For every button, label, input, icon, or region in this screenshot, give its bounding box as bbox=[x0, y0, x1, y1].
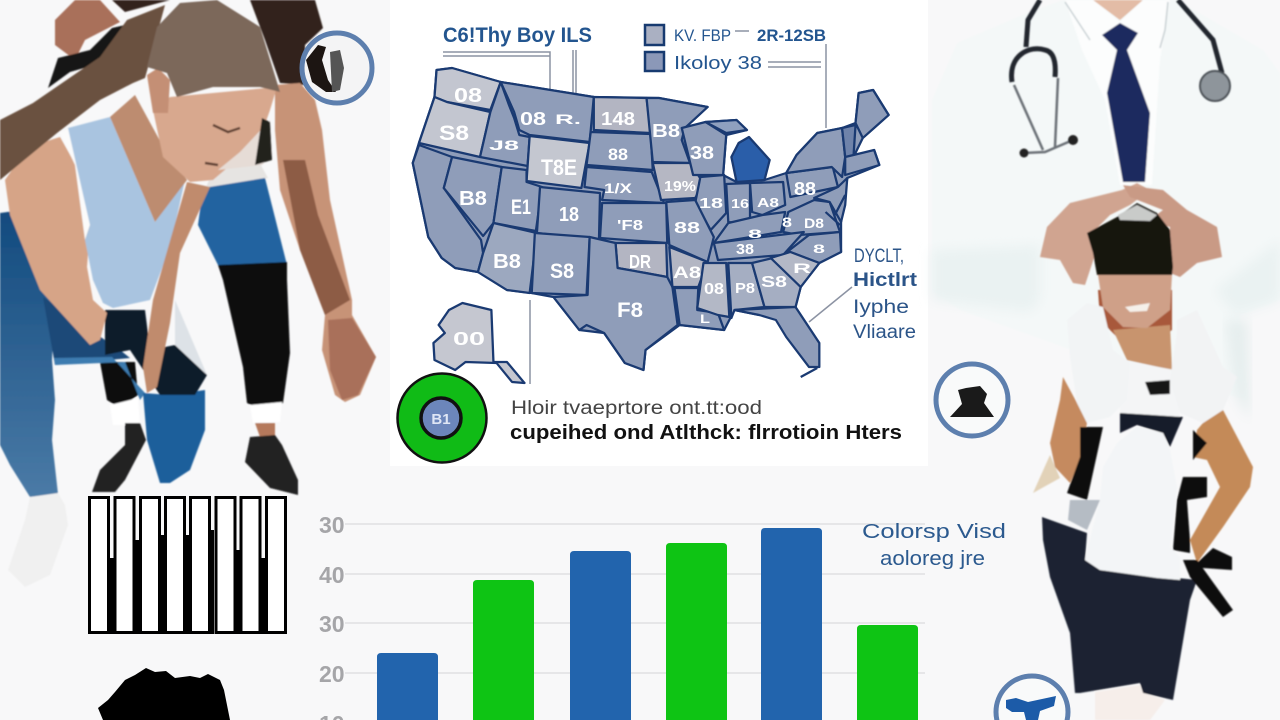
woman cap bbox=[1087, 203, 1173, 275]
arm near bbox=[5, 137, 107, 345]
state value labels: 1/X bbox=[604, 180, 633, 196]
caption text bbox=[510, 398, 902, 444]
state value labels: T8E bbox=[541, 155, 577, 180]
bar chart bbox=[319, 512, 925, 720]
state value labels: 38 bbox=[690, 143, 714, 163]
state value labels: S8 bbox=[439, 122, 469, 145]
ponytail bbox=[0, 5, 165, 180]
woman arms bbox=[1050, 377, 1087, 483]
panel: map bbox=[390, 0, 928, 466]
near leg bbox=[0, 210, 58, 497]
barcode bars bbox=[90, 498, 286, 634]
arm far bbox=[143, 182, 210, 393]
stethoscope bbox=[1012, 0, 1222, 153]
state value labels: 148 bbox=[601, 109, 635, 129]
front shin bbox=[143, 390, 205, 483]
state value labels: 38 bbox=[736, 241, 754, 258]
photo: athlete woman and trainer bbox=[0, 0, 376, 587]
icon: green ring badge bbox=[398, 374, 486, 462]
chart legend text: aoloreg jre bbox=[880, 548, 985, 570]
state value labels: 08 bbox=[454, 85, 482, 107]
map legend: Ikoloy 38 bbox=[674, 53, 762, 73]
state value labels: 08 bbox=[520, 109, 546, 129]
caption text: cupeihed ond Atlthck: flrrotioin Hters bbox=[510, 422, 902, 444]
state value labels: P8 bbox=[735, 280, 755, 297]
state value labels: DR bbox=[629, 252, 651, 272]
state value labels: 18 bbox=[559, 204, 579, 226]
state value labels: L bbox=[700, 312, 710, 326]
doctor neck and shirt bbox=[1093, 0, 1143, 20]
callout text: right side: Vliaare bbox=[853, 322, 916, 343]
woman face, hair and neck bbox=[1098, 290, 1172, 345]
chart legend text: Colorsp Visd bbox=[862, 521, 1006, 543]
axis labels: 40 bbox=[319, 562, 345, 588]
woman shorts bbox=[1042, 517, 1197, 700]
thigh bbox=[43, 297, 130, 365]
state value labels bbox=[439, 85, 826, 349]
state value labels: E1 bbox=[511, 196, 531, 219]
woman top bbox=[1120, 360, 1180, 420]
map legend: 2R-12SB bbox=[757, 26, 826, 45]
state value labels: D8 bbox=[804, 215, 824, 231]
axis labels: 30 bbox=[319, 611, 345, 637]
state value labels: J8 bbox=[489, 137, 519, 153]
map legend bbox=[645, 25, 826, 73]
bars bbox=[377, 528, 918, 720]
state value labels: A8 bbox=[757, 195, 779, 210]
heading: map title: C6!Thy Boy ILS bbox=[443, 24, 592, 47]
state shapes bbox=[413, 68, 889, 383]
callout text: right side: DYCLT, bbox=[854, 246, 904, 267]
trainer behind bbox=[112, 0, 170, 12]
axis labels: 30 bbox=[319, 512, 345, 538]
hands bbox=[1040, 183, 1150, 285]
axis labels: 20 bbox=[319, 661, 345, 687]
icon: badge top left bbox=[302, 33, 372, 103]
caption text: Hloir tvaeprtore ont.tt:ood bbox=[511, 398, 762, 419]
state value labels: 8 bbox=[782, 214, 792, 230]
belt strap bbox=[1183, 548, 1233, 617]
tie bbox=[1102, 23, 1150, 182]
callout text: right side: Iyphe bbox=[853, 297, 909, 318]
state value labels: 19% bbox=[664, 178, 696, 195]
state value labels: 8 bbox=[748, 227, 763, 241]
axis labels bbox=[319, 512, 345, 720]
state value labels: 88 bbox=[608, 145, 628, 164]
state value labels: A8 bbox=[673, 263, 701, 282]
callout text: right side: Hictlrt bbox=[853, 270, 918, 291]
photo: doctor and woman bbox=[932, 0, 1280, 720]
shirt bbox=[60, 128, 90, 240]
state value labels: 18 bbox=[699, 195, 723, 212]
map legend: KV. FBP bbox=[674, 26, 731, 45]
state value labels: 88 bbox=[794, 179, 816, 199]
state value labels: 'F8 bbox=[617, 217, 643, 234]
state value labels: B8 bbox=[493, 251, 521, 273]
state value labels: 8 bbox=[813, 242, 826, 256]
state value labels: S8 bbox=[550, 260, 574, 283]
state value labels: 08 bbox=[704, 281, 724, 298]
state value labels: B8 bbox=[652, 121, 680, 141]
callout text: right side bbox=[853, 246, 918, 343]
icon: green ring badge: B1 bbox=[431, 411, 451, 428]
state value labels: F8 bbox=[617, 299, 643, 322]
state value labels: S8 bbox=[761, 274, 787, 291]
icon: black silhouette bbox=[98, 668, 230, 720]
knee bbox=[175, 300, 207, 375]
state value labels: 00 bbox=[453, 329, 485, 349]
state value labels: B8 bbox=[459, 188, 487, 210]
state value labels: R. bbox=[555, 111, 581, 127]
doctor coat bbox=[932, 0, 1280, 420]
head bbox=[153, 87, 277, 182]
us map bbox=[413, 68, 889, 383]
chart legend text bbox=[862, 521, 1006, 570]
icon: badge bottom right bbox=[996, 676, 1068, 720]
icon: badge right middle bbox=[936, 364, 1008, 436]
state value labels: R bbox=[793, 260, 811, 276]
state value labels: 88 bbox=[674, 220, 700, 237]
state value labels: 16 bbox=[731, 196, 749, 211]
